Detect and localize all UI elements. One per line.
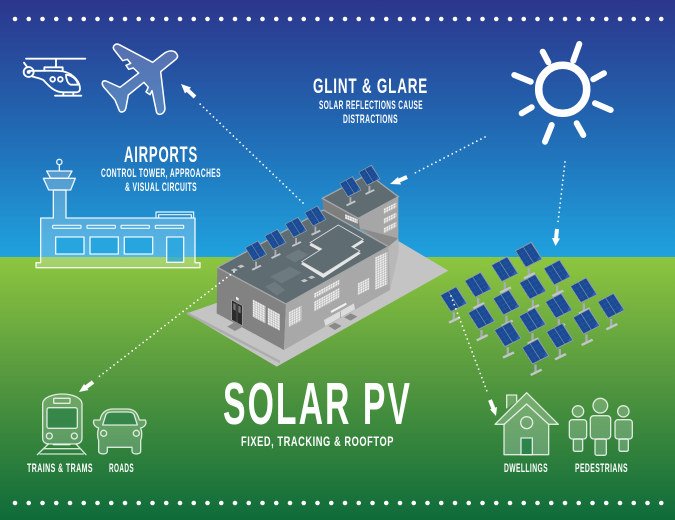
text: glint detail line 2: DISTRACTIONS	[343, 112, 398, 126]
icon: car	[94, 409, 146, 454]
label: pedestrians: PEDESTRIANS	[575, 463, 628, 475]
icon: pedestrians	[569, 398, 632, 455]
left wall windows	[236, 297, 280, 331]
rooftop solar panels	[245, 165, 380, 271]
icon: airport building and control tower	[36, 159, 200, 268]
right wall windows	[289, 202, 396, 327]
solar panel field	[440, 242, 625, 376]
label: dwellings: DWELLINGS	[504, 463, 548, 475]
label: trains and trams: TRAINS & TRAMS	[27, 463, 93, 475]
entrance	[227, 303, 357, 331]
building illustration	[187, 165, 448, 367]
top dotted border	[15, 17, 662, 21]
text: airports detail line 1: CONTROL TOWER, APPROACHES	[101, 166, 221, 180]
text: airports detail line 2: & VISUAL CIRCUITS	[125, 180, 197, 194]
heading: glint and glare: GLINT & GLARE	[313, 75, 428, 98]
heading: airports: AIRPORTS	[124, 142, 198, 167]
arrow: sun to building	[390, 137, 485, 184]
icon: airplane	[102, 44, 178, 114]
roof vents	[231, 265, 315, 282]
label: roads: ROADS	[109, 463, 134, 475]
arrow: sun to solar field	[552, 162, 565, 246]
main roof	[217, 210, 388, 304]
grass background	[0, 257, 675, 520]
heading: solar pv: SOLAR PV	[223, 371, 412, 437]
bottom dotted border	[15, 501, 662, 505]
icon: house	[495, 393, 558, 455]
main left wall	[217, 267, 286, 350]
upper roof	[322, 174, 398, 218]
ground plate	[187, 240, 448, 367]
icon: helicopter	[24, 59, 85, 96]
arrow: building to trains and roads	[79, 272, 234, 392]
upper block walls	[322, 197, 398, 290]
raised roof section	[302, 225, 363, 277]
arrow: solar field to dwellings	[451, 296, 497, 416]
text: glint detail line 1: SOLAR REFLECTIONS CAUSE	[319, 98, 423, 112]
icon: train	[37, 394, 86, 455]
main right wall	[284, 247, 390, 350]
arrow: building to airplane	[181, 84, 303, 203]
subheading: fixed, tracking and rooftop: FIXED, TRACKING & ROOFTOP	[241, 433, 394, 449]
icon: sun	[514, 44, 611, 142]
door	[232, 300, 242, 326]
sky background	[0, 0, 675, 258]
roof patches	[265, 230, 347, 296]
